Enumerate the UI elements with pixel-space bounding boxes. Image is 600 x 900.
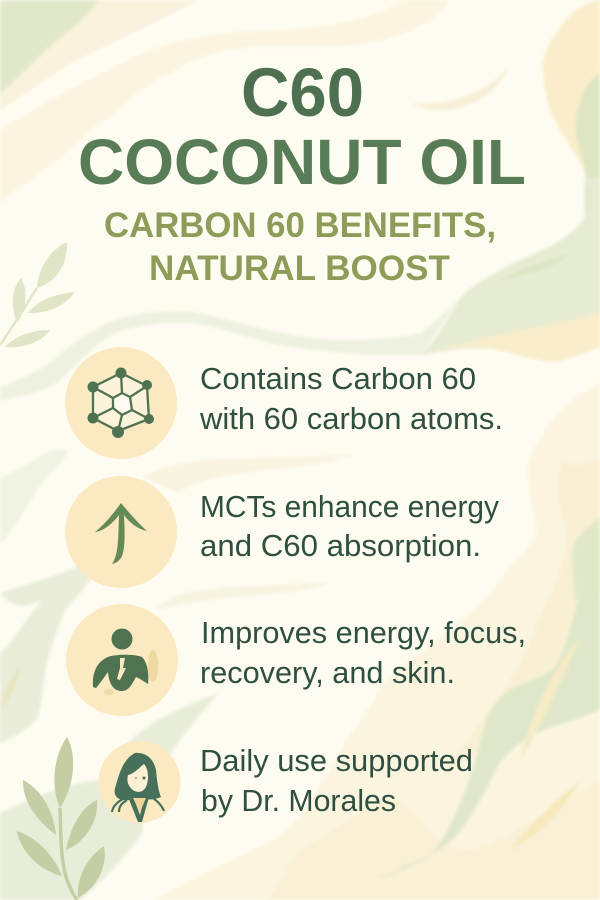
text: Improves energy, focus, — [201, 615, 526, 650]
icon: leaf sprig left — [0, 242, 75, 347]
title: COCONUT OIL — [78, 126, 526, 198]
text: with 60 carbon atoms. — [199, 401, 503, 436]
title — [78, 54, 526, 198]
subtitle: CARBON 60 BENEFITS, — [104, 206, 496, 245]
text: recovery, and skin. — [200, 655, 455, 690]
icon: carbon molecule — [65, 347, 177, 459]
icon: up arrow — [65, 476, 177, 588]
text: Contains Carbon 60 — [200, 361, 476, 396]
icon: doctor portrait — [98, 741, 180, 823]
text — [200, 615, 526, 690]
icon: person with tie — [66, 604, 178, 716]
title: C60 — [241, 54, 364, 131]
item 3 — [66, 604, 526, 716]
text: Daily use supported — [200, 743, 473, 778]
text — [199, 361, 503, 436]
item 1 — [65, 347, 503, 459]
subtitle: NATURAL BOOST — [149, 249, 450, 288]
icon: leaf sprig bottom — [17, 737, 105, 900]
text: MCTs enhance energy — [200, 489, 499, 524]
item 2 — [65, 476, 499, 588]
item 4 — [98, 741, 473, 823]
text — [200, 743, 473, 818]
text — [200, 489, 499, 563]
text: and C60 absorption. — [200, 528, 481, 563]
subtitle — [104, 206, 496, 288]
text: by Dr. Morales — [201, 783, 396, 818]
